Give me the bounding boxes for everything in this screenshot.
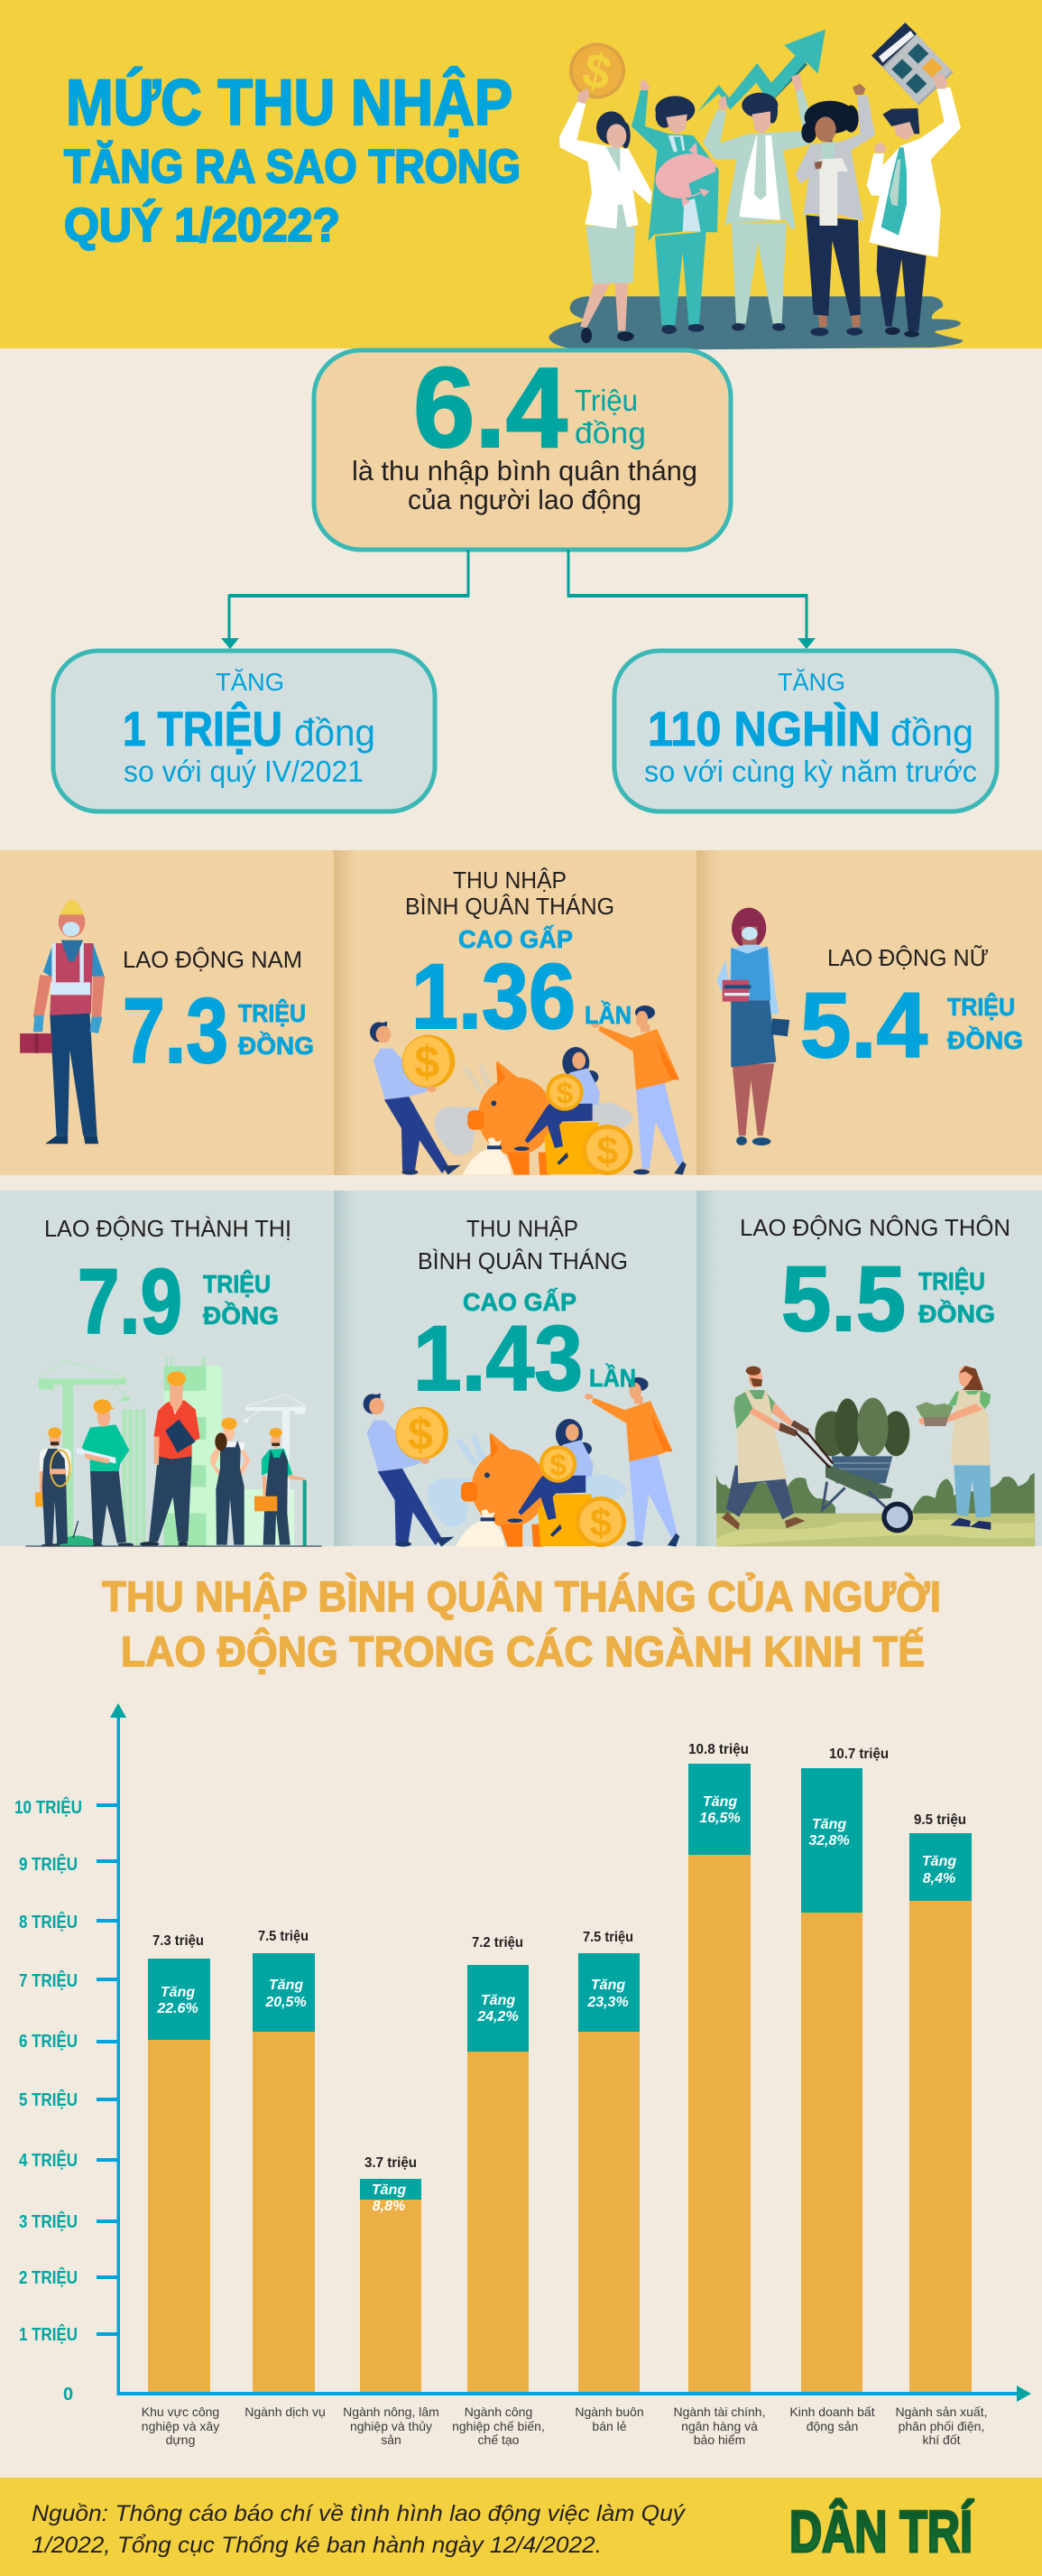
sector labels: Ngành tài chính, [674, 2405, 765, 2419]
value: 1.43 times higher: 1.43 [413, 1307, 583, 1410]
value: 1.36 times higher: CAO GẤP [458, 925, 573, 953]
panel: increase vs same period last year: đồng [890, 711, 973, 754]
value: rural 5.5 million: ĐỒNG [918, 1300, 995, 1328]
y axis labels: 3 TRIỆU [19, 2210, 78, 2232]
illustration: five workers celebrating income growth: $ [577, 43, 616, 101]
y axis labels: 8 TRIỆU [19, 1911, 78, 1932]
sector labels: Ngành buôn [575, 2405, 644, 2419]
value: rural 5.5 million: TRIỆU [918, 1267, 985, 1295]
value: male 7.3 million: 7.3 [123, 979, 228, 1082]
sector labels: sản [381, 2432, 401, 2447]
sector labels: khí đốt [922, 2432, 961, 2447]
value: male 7.3 million: TRIỆU [238, 999, 306, 1027]
logo: Dân Trí: DÂN TRÍ [789, 2498, 973, 2564]
label: male: LAO ĐỘNG NAM [123, 946, 302, 973]
unit: triệu đồng: Triệu [575, 384, 638, 417]
source note: 1/2022, Tổng cục Thống kê ban hành ngày 12/4/2022. [32, 2533, 602, 2558]
bars: sector values [148, 1764, 972, 2394]
panel: male vs female income [0, 850, 1042, 1175]
description: của người lao động [408, 484, 641, 515]
sector labels: dựng [166, 2432, 195, 2447]
description: là thu nhập bình quân tháng [352, 455, 697, 486]
sector labels: nghiệp và thủy [350, 2419, 432, 2433]
heading: monthly average income, center: THU NHẬP [453, 866, 567, 894]
value: 1.43 times higher [413, 1288, 636, 1410]
panel: header [0, 0, 1042, 350]
title [64, 67, 521, 252]
increase percentages: 24,2% [476, 2009, 519, 2025]
value: male 7.3 million [123, 979, 314, 1082]
sector labels: phân phối điện, [899, 2419, 984, 2433]
value labels: 10.8 triệu [688, 1742, 749, 1757]
y axis labels: 4 TRIỆU [19, 2149, 78, 2171]
panel: increase vs Q4/2021 [53, 651, 435, 811]
value labels: 7.5 triệu [583, 1930, 633, 1945]
panel: increase vs Q4/2021: TĂNG [216, 668, 284, 696]
label: urban: LAO ĐỘNG THÀNH THỊ [44, 1215, 291, 1242]
value: 1.36 times higher: 1.36 [411, 945, 576, 1048]
heading: monthly average income, center: THU NHẬP [466, 1215, 578, 1242]
value: male 7.3 million: ĐỒNG [238, 1032, 314, 1060]
y axis labels: 1 TRIỆU [19, 2323, 78, 2345]
value: 1.36 times higher: LẦN [585, 1001, 632, 1029]
sector labels: Kinh doanh bất [789, 2405, 875, 2419]
y axis labels [14, 1796, 82, 2405]
value: 1.43 times higher: LẦN [589, 1364, 636, 1392]
panel: increase vs Q4/2021: so với quý IV/2021 [124, 755, 364, 788]
panel: increase vs same period last year: 110 NGHÌN [648, 702, 881, 756]
illustration: five workers celebrating income growth [549, 23, 963, 350]
y axis labels: 0 [63, 2385, 73, 2405]
unit: triệu đồng: đồng [575, 416, 646, 449]
y axis labels: 6 TRIỆU [19, 2030, 78, 2052]
heading: monthly average income, center [418, 1215, 628, 1274]
increase percentages: 16,5% [699, 1811, 741, 1826]
heading: income by economic sector [102, 1572, 941, 1675]
bar chart: income by sector [14, 1703, 1031, 2447]
panel: increase vs same period last year [614, 651, 997, 811]
sector labels [142, 2405, 987, 2447]
illustration: male worker [20, 899, 105, 1144]
value: 1.43 times higher: CAO GẤP [463, 1288, 576, 1316]
illustration: piggy bank and coins [364, 1377, 679, 1547]
value: female 5.4 million: 5.4 [800, 974, 927, 1077]
increase percentages: 23,3% [586, 1995, 629, 2010]
sector labels: nghiệp và xây [142, 2419, 219, 2433]
title: QUÝ 1/2022? [64, 199, 340, 252]
increase percentages: Tăng [481, 1993, 515, 2008]
y axis labels: 5 TRIỆU [19, 2089, 78, 2110]
panel: increase vs Q4/2021: 1 TRIỆU [123, 701, 282, 756]
value labels [152, 1742, 966, 2171]
increase percentages: Tăng [922, 1854, 956, 1869]
heading: monthly average income, center: BÌNH QUÂN THÁNG [418, 1247, 628, 1274]
illustration: urban construction workers [25, 1357, 322, 1547]
label: female: LAO ĐỘNG NỮ [827, 944, 989, 971]
unit: triệu đồng [575, 384, 646, 449]
sector labels: động sản [807, 2419, 858, 2433]
y axis labels: 7 TRIỆU [19, 1969, 78, 1991]
illustration: rural farmers with wheelbarrow [716, 1366, 1035, 1546]
sector labels: chế tạo [478, 2432, 520, 2447]
increase percentages: 8,8% [373, 2199, 405, 2214]
value: rural 5.5 million: 5.5 [781, 1247, 906, 1350]
sector labels: Ngành dịch vụ [244, 2405, 326, 2419]
sector labels: bán lẻ [592, 2419, 627, 2433]
sector labels: Ngành nông, lâm [343, 2405, 439, 2419]
sector labels: Khu vực công [142, 2405, 219, 2419]
increase percentages: 8,4% [923, 1871, 955, 1886]
sector labels: nghiệp chế biến, [452, 2419, 545, 2433]
increase percentages: 32,8% [808, 1833, 850, 1849]
value: female 5.4 million: TRIỆU [947, 993, 1015, 1021]
value: 1.36 times higher [411, 925, 632, 1048]
big number 6.4: 6.4 [413, 344, 567, 471]
sector labels: Ngành công [465, 2405, 532, 2419]
panel: main income figure [314, 344, 731, 550]
x axis with arrow [117, 2386, 1031, 2402]
increase percentages: 22.6% [156, 2001, 198, 2016]
heading: income by economic sector: LAO ĐỘNG TRONG CÁC NGÀNH KINH TẾ [121, 1627, 925, 1675]
panel: increase vs Q4/2021: đồng [294, 711, 375, 754]
value: female 5.4 million: ĐỒNG [947, 1026, 1023, 1054]
value labels: 10.7 triệu [829, 1747, 889, 1762]
value: urban 7.9 million: TRIỆU [203, 1270, 271, 1298]
increase percentages: Tăng [372, 2182, 406, 2198]
sector labels: bảo hiểm [694, 2432, 745, 2447]
value labels: 3.7 triệu [364, 2155, 417, 2171]
value: female 5.4 million [800, 974, 1023, 1077]
heading: income by economic sector: THU NHẬP BÌNH QUÂN THÁNG CỦA NGƯỜI [102, 1572, 941, 1620]
source note: Nguồn: Thông cáo báo chí về tình hình lao động việc làm Quý [32, 2501, 687, 2526]
increase percentages: Tăng [269, 1978, 303, 1993]
arrow: connector to left box [221, 550, 469, 649]
illustration: piggy bank and coins [370, 1005, 687, 1175]
value: urban 7.9 million: 7.9 [78, 1250, 182, 1353]
value labels: 7.2 triệu [472, 1935, 523, 1951]
y axis labels: 2 TRIỆU [19, 2266, 78, 2288]
value labels: 9.5 triệu [914, 1812, 966, 1828]
source note [32, 2501, 687, 2558]
increase percentages: Tăng [812, 1817, 846, 1832]
sector labels: Ngành sản xuất, [896, 2405, 987, 2419]
increase percentages: Tăng [703, 1794, 737, 1810]
increase percentages [156, 1794, 956, 2214]
title: TĂNG RA SAO TRONG [64, 141, 521, 193]
y axis labels: 10 TRIỆU [14, 1796, 82, 1818]
panel: urban vs rural income [0, 1191, 1042, 1547]
arrow: connector to right box [567, 550, 816, 649]
increase percentages: Tăng [591, 1978, 625, 1993]
value labels: 7.5 triệu [258, 1929, 309, 1944]
value: urban 7.9 million: ĐỒNG [203, 1302, 279, 1330]
increase percentages: 20,5% [264, 1995, 307, 2010]
sector labels: ngân hàng và [681, 2419, 758, 2433]
y axis with arrow [97, 1703, 126, 2395]
description [352, 455, 697, 515]
value: rural 5.5 million [781, 1247, 995, 1350]
value labels: 7.3 triệu [152, 1933, 204, 1949]
heading: monthly average income, center: BÌNH QUÂN THÁNG [405, 893, 614, 920]
label: rural: LAO ĐỘNG NÔNG THÔN [740, 1214, 1010, 1241]
value: urban 7.9 million [78, 1250, 279, 1353]
panel: increase vs same period last year: TĂNG [778, 668, 845, 696]
heading: monthly average income, center [405, 866, 614, 920]
y axis labels: 9 TRIỆU [19, 1853, 78, 1875]
title: MỨC THU NHẬP [66, 67, 512, 139]
illustration: female worker [716, 908, 789, 1145]
panel: increase vs same period last year: so với cùng kỳ năm trước [644, 755, 977, 788]
panel: footer [0, 2478, 1042, 2576]
increase percentages: Tăng [161, 1985, 195, 2000]
